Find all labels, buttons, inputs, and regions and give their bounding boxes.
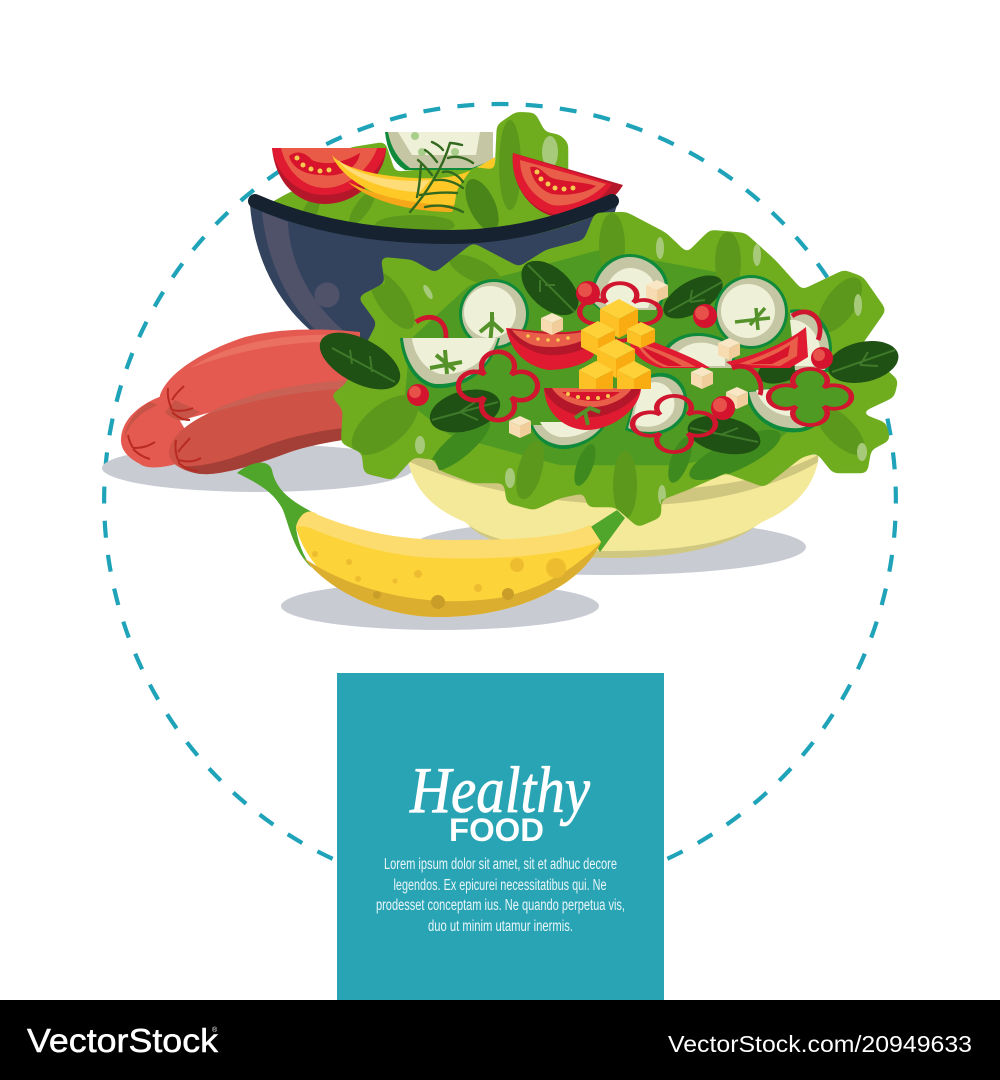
cucumber right side xyxy=(790,309,832,372)
back salad bowl xyxy=(250,112,623,350)
ground shadows xyxy=(102,444,806,630)
cube bottom left xyxy=(579,361,613,389)
top sausage xyxy=(160,329,360,421)
lettuce inner shade xyxy=(405,250,830,465)
cucumber centre xyxy=(660,333,735,368)
cucumber lower centre xyxy=(530,422,606,449)
cucumber half left xyxy=(400,338,500,388)
cube centre xyxy=(597,339,635,378)
banana top strip xyxy=(296,512,601,558)
bowl foot xyxy=(465,520,762,558)
back cucumber xyxy=(385,132,493,170)
salad toppings xyxy=(311,250,902,460)
cherry tomatoes xyxy=(407,281,833,420)
cucumber half top xyxy=(590,254,668,310)
cucumber round right xyxy=(714,275,788,349)
cube top xyxy=(600,299,638,338)
back tomato left xyxy=(272,148,386,204)
back front leaf xyxy=(452,112,600,240)
tomato wedge lower xyxy=(544,388,641,430)
bowl side highlight xyxy=(262,212,372,350)
body text: Lorem ipsum dolor sit amet, sit et adhuc decore xyxy=(384,856,617,873)
front salad bowl xyxy=(407,452,819,558)
banana xyxy=(237,463,625,617)
tomato wedge centre right xyxy=(628,332,710,368)
heading: Healthy: Healthy xyxy=(409,754,591,827)
banana stems xyxy=(237,463,312,568)
lettuce leaf folds xyxy=(342,213,873,519)
red pepper rings xyxy=(416,283,851,452)
cucumber lower right xyxy=(745,385,828,432)
lettuce outline xyxy=(331,212,898,527)
front sausage xyxy=(169,380,370,474)
cube left xyxy=(581,321,615,356)
back sausage xyxy=(121,395,200,467)
bowl body xyxy=(250,205,617,350)
body text: legendos. Ex epicurei necessitatibus qui. Ne xyxy=(394,877,606,894)
dashed circle frame xyxy=(104,104,896,896)
lettuce dark folds xyxy=(432,422,781,486)
back tomato right xyxy=(513,153,623,217)
back lettuce xyxy=(262,142,606,245)
body text: prodesset conceptam ius. Ne quando perpetua vis, xyxy=(376,897,625,914)
mango cubes xyxy=(579,299,655,389)
body text xyxy=(376,856,625,935)
lettuce highlights xyxy=(415,237,867,505)
front lettuce xyxy=(331,212,898,527)
tomato wedge right xyxy=(726,327,808,368)
teal info panel xyxy=(337,673,664,1000)
cucumber lower mid xyxy=(625,373,687,435)
body text: duo ut minim utamur inermis. xyxy=(428,918,573,935)
footer url: VectorStock.com/20949633 xyxy=(668,1031,972,1057)
sausages xyxy=(121,329,370,474)
banana body xyxy=(296,512,601,617)
cube bottom right xyxy=(617,361,651,389)
tomato wedge left xyxy=(506,328,594,370)
heading: FOOD: FOOD xyxy=(449,812,544,848)
banana tip xyxy=(586,510,625,552)
bowl highlight dot xyxy=(314,282,340,308)
tomato wedges xyxy=(506,327,808,430)
bowl body xyxy=(407,455,819,551)
spinach leaves xyxy=(311,250,902,460)
footer logo: VectorStock xyxy=(27,1022,219,1059)
rosemary sprig xyxy=(410,142,473,212)
bowl inner band xyxy=(410,452,818,505)
tofu cubes xyxy=(509,280,748,438)
banana spots xyxy=(312,551,566,609)
footer bar xyxy=(0,1000,1000,1080)
banana under shade xyxy=(304,542,601,617)
footer registered mark: ® xyxy=(212,1026,218,1034)
cube right xyxy=(627,322,655,348)
back mango slice xyxy=(332,155,495,212)
cucumber slices xyxy=(400,254,832,449)
cucumber round left xyxy=(459,279,529,349)
bowl rim xyxy=(255,201,612,237)
